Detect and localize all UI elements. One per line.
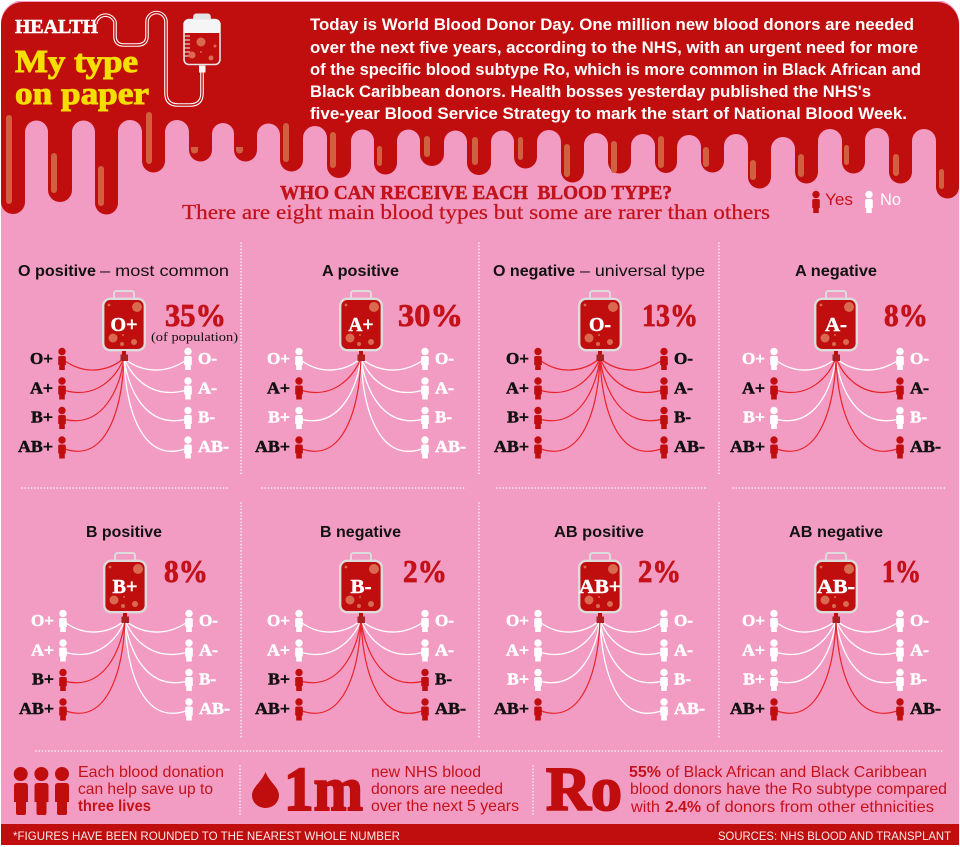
panel: AB positive: AB+ <box>494 699 529 718</box>
panel: AB negative: 1% <box>882 553 921 589</box>
panel: A negative: O- <box>910 349 929 368</box>
panel: A negative: B- <box>910 408 927 427</box>
stat: three lives <box>14 764 224 815</box>
panel: A positive: 30% <box>398 297 463 333</box>
intro text: Black Caribbean donors. Health bosses yesterday published the NHS's <box>310 82 871 101</box>
stat: Ro subtype: of Black African and Black Caribbean <box>666 764 927 781</box>
panel: AB negative: AB negative <box>789 524 883 541</box>
panel: B positive: AB- <box>199 699 230 718</box>
panel: B positive: 8% <box>164 553 208 589</box>
panel: A positive: A+ <box>267 378 290 397</box>
panel: B negative: AB- <box>435 699 466 718</box>
panel: O positive: O- <box>198 349 217 368</box>
panel: O negative: 13% <box>642 297 698 333</box>
panel: O negative: A+ <box>506 378 529 397</box>
stat: Ro subtype: Ro <box>546 756 622 824</box>
panel: A negative: 8% <box>884 297 928 333</box>
icon: three people <box>14 767 69 815</box>
panel: AB negative: B+ <box>743 670 765 689</box>
panel: B negative: B- <box>435 670 452 689</box>
panel: AB positive: B+ <box>507 670 529 689</box>
stat: Ro subtype: blood donors have the Ro subtype compared <box>630 781 947 798</box>
legend <box>812 191 901 213</box>
panel: O positive: (of population) <box>151 329 238 344</box>
panel: AB negative: AB- <box>910 699 941 718</box>
section label: HEALTH: HEALTH <box>15 16 98 38</box>
panel: AB negative: A+ <box>742 640 765 659</box>
intro text: Today is World Blood Donor Day. One million new blood donors are needed <box>310 15 914 34</box>
legend: Yes <box>825 191 853 209</box>
panel: AB negative: B- <box>910 670 927 689</box>
panel: A positive: O- <box>435 349 454 368</box>
title: My type on paper <box>15 43 149 111</box>
panel: AB positive: B- <box>674 670 691 689</box>
panel: A positive: O+ <box>267 349 290 368</box>
panel: O positive: AB- <box>198 437 229 456</box>
legend: No <box>880 191 901 209</box>
heading: There are eight main blood types but some are rarer than others <box>182 200 770 224</box>
heading: WHO CAN RECEIVE EACH BLOOD TYPE? <box>280 182 672 204</box>
panel: AB negative <box>730 524 941 720</box>
icon: blood bag with tube <box>96 12 220 105</box>
panel: A positive: B- <box>435 408 452 427</box>
stat: Ro subtype: 2.4% <box>665 799 701 816</box>
panel: A positive: B+ <box>268 408 290 427</box>
panel: O negative: B+ <box>507 408 529 427</box>
panel: AB negative: O- <box>910 611 929 630</box>
panel: AB positive: AB positive <box>554 524 644 541</box>
stat: 1m new donors: new NHS blood <box>371 764 481 781</box>
stat: Ro subtype <box>546 756 947 824</box>
panel: O negative: O+ <box>506 349 529 368</box>
panel: B positive: B positive <box>86 524 162 541</box>
footer bar: SOURCES: NHS BLOOD AND TRANSPLANT <box>718 829 952 843</box>
panel: A negative: A- <box>910 378 929 397</box>
panel: B positive: B+ <box>32 670 54 689</box>
panel: B positive: B- <box>199 670 216 689</box>
panel: O negative: B- <box>674 408 691 427</box>
panel: AB negative: A- <box>910 640 929 659</box>
intro text: over the next five years, according to the NHS, with an urgent need for more <box>310 38 918 57</box>
panel: O positive: AB+ <box>18 437 53 456</box>
panel: AB positive: A+ <box>506 640 529 659</box>
panel: AB negative: O+ <box>742 611 765 630</box>
intro text: five-year Blood Service Strategy to mark the start of National Blood Week. <box>310 104 907 123</box>
stat: three lives: can help save up to <box>78 781 213 798</box>
panel: A negative: A negative <box>795 263 877 280</box>
panel: A negative: O+ <box>742 349 765 368</box>
panel: A negative: A+ <box>742 378 765 397</box>
panel: A negative: AB+ <box>730 437 765 456</box>
panel: A positive: A+ <box>348 314 374 336</box>
panel: B negative: B- <box>350 576 372 598</box>
stat: 1m new donors: over the next 5 years <box>371 798 519 815</box>
panel: O negative: O- <box>589 314 611 336</box>
panel: B negative <box>255 524 466 720</box>
panel: O negative: O negative <box>493 263 575 280</box>
stat: three lives: Each blood donation <box>78 764 224 781</box>
panel: O positive: A+ <box>30 378 53 397</box>
panel: AB positive <box>494 524 705 720</box>
panel: B negative: O- <box>435 611 454 630</box>
panel: AB negative: AB- <box>817 576 855 598</box>
stat: Ro subtype: of donors from other ethnicities <box>706 799 934 816</box>
panel: AB positive: O- <box>674 611 693 630</box>
panel: O positive: O+ <box>110 314 138 336</box>
panel: B negative: B+ <box>268 670 290 689</box>
panel: B positive: AB+ <box>19 699 54 718</box>
panel: B positive: O+ <box>31 611 54 630</box>
panel: O positive: A- <box>198 378 217 397</box>
header: blood drips banner <box>1 2 959 214</box>
panel: A positive: A- <box>435 378 454 397</box>
stat: Ro subtype: 55% <box>629 764 661 781</box>
panel: O positive: – most common <box>100 263 229 280</box>
panel: A positive <box>255 263 466 458</box>
panel: A positive: AB+ <box>255 437 290 456</box>
title: My type on paper: on paper <box>15 75 149 111</box>
intro text <box>310 15 921 123</box>
dotted dividers <box>22 243 945 816</box>
panel: O negative: O- <box>674 349 693 368</box>
panel: O positive: 35% <box>165 297 226 333</box>
panel: AB positive: A- <box>674 640 693 659</box>
panel: O positive: O+ <box>30 349 53 368</box>
panel: O positive <box>18 263 238 458</box>
panel: AB positive: O+ <box>506 611 529 630</box>
panel: AB positive: AB- <box>674 699 705 718</box>
title: My type on paper: My type <box>15 43 138 79</box>
stat: three lives: three lives <box>78 798 151 815</box>
panel: O positive: O positive <box>18 263 96 280</box>
panel: B positive: B+ <box>112 576 138 598</box>
panel: A positive: A positive <box>322 263 399 280</box>
stat: 1m new donors: 1m <box>284 756 363 824</box>
footer bar <box>0 824 960 847</box>
panel: A negative: A- <box>825 314 847 336</box>
stat: 1m new donors: donors are needed <box>371 781 503 798</box>
intro text: of the specific blood subtype Ro, which is more common in Black African and <box>310 60 921 79</box>
panel: B negative: B negative <box>320 524 401 541</box>
panel: B negative: A+ <box>267 640 290 659</box>
stat: 1m new donors <box>252 756 519 824</box>
panel: B positive <box>19 524 230 720</box>
panel: A negative: B+ <box>743 408 765 427</box>
panel: O negative: AB- <box>674 437 705 456</box>
panel: AB positive: AB+ <box>579 576 621 598</box>
panel: B negative: O+ <box>267 611 290 630</box>
panel: O negative: A- <box>674 378 693 397</box>
panel: AB negative: AB+ <box>730 699 765 718</box>
panel: A negative: AB- <box>910 437 941 456</box>
panel: B negative: 2% <box>403 553 447 589</box>
panel: B negative: A- <box>435 640 454 659</box>
panel: AB positive: 2% <box>638 553 681 589</box>
panel: B positive: O- <box>199 611 218 630</box>
panel: O negative: – universal type <box>580 263 705 280</box>
icon: blood drop <box>252 772 279 808</box>
panel: B negative: AB+ <box>255 699 290 718</box>
stat: Ro subtype: with <box>630 799 660 816</box>
panel: O negative: AB+ <box>494 437 529 456</box>
panel: A negative <box>730 263 941 458</box>
footer bar: *FIGURES HAVE BEEN ROUNDED TO THE NEAREST WHOLE NUMBER <box>13 829 400 843</box>
panel: A positive: AB- <box>435 437 466 456</box>
panel: O positive: B+ <box>31 408 53 427</box>
heading <box>182 182 770 224</box>
panel: B positive: A+ <box>31 640 54 659</box>
panel: B positive: A- <box>199 640 218 659</box>
panel: O negative <box>493 263 705 458</box>
panel: O positive: B- <box>198 408 215 427</box>
